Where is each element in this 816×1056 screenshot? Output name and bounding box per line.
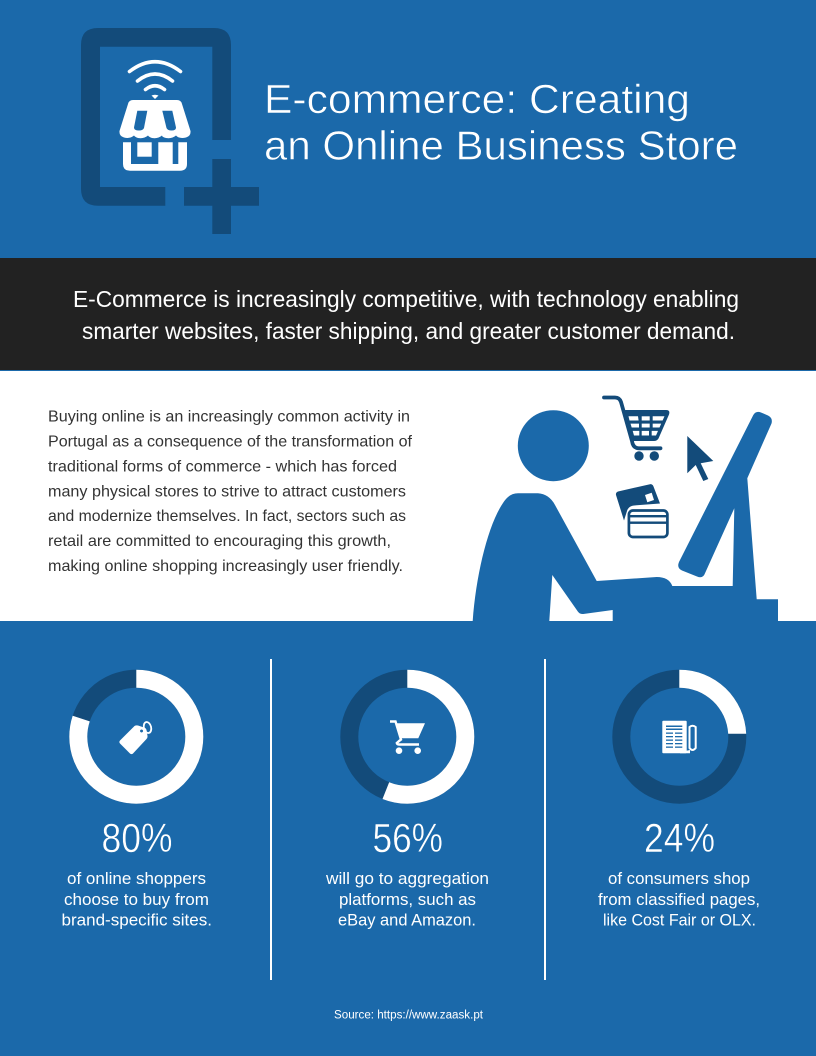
icon: credit cards [616, 484, 667, 537]
panel: description and illustration [0, 371, 816, 621]
icon: cart [390, 722, 425, 754]
body paragraph: and modernize themselves. In fact, sectors such as [48, 508, 406, 525]
icon: online store logo frame with plus [81, 28, 259, 234]
body paragraph: traditional forms of commerce - which has forced [48, 458, 397, 475]
panel: intro band [0, 258, 816, 370]
donut chart: 80% [78, 679, 194, 795]
stat: 24 percent [598, 670, 760, 930]
body paragraph: Buying online is an increasingly common activity in [48, 408, 410, 426]
donut chart: 24% [621, 670, 746, 795]
intro statement [73, 286, 739, 344]
title: E-commerce: Creating [264, 76, 690, 122]
icon: shopping cart [604, 398, 669, 461]
title: an Online Business Store [264, 122, 738, 168]
divider [270, 659, 272, 980]
stat: 56 percent [325, 679, 489, 930]
intro statement: E-Commerce is increasingly competitive, with technology enabling [73, 286, 739, 312]
stat description: eBay and Amazon. [338, 912, 476, 930]
divider [544, 659, 546, 980]
stat description [325, 870, 489, 930]
stat description: like Cost Fair or OLX. [603, 912, 756, 930]
illustration: person at computer [473, 410, 778, 621]
panel: header [81, 28, 738, 234]
body paragraph: making online shopping increasingly user friendly. [48, 558, 403, 575]
body paragraph: many physical stores to strive to attract customers [48, 483, 406, 500]
icon: price tag [119, 721, 152, 754]
stat description [598, 870, 760, 930]
stat description [62, 870, 212, 930]
stat description: of online shoppers [67, 870, 206, 888]
stat value: 80% [102, 815, 172, 861]
donut chart: 56% [349, 679, 465, 795]
source note: Source: https://www.zaask.pt [334, 1010, 484, 1022]
stat description: brand-specific sites. [62, 912, 212, 930]
stat value: 24% [644, 815, 715, 861]
panel: statistics [62, 659, 760, 980]
body paragraph [48, 408, 413, 575]
stat description: platforms, such as [339, 891, 476, 909]
icon: mouse cursor [687, 436, 713, 481]
body paragraph: Portugal as a consequence of the transformation of [48, 434, 413, 450]
stat description: from classified pages, [598, 891, 760, 909]
stat: 80 percent [62, 679, 212, 930]
intro statement: smarter websites, faster shipping, and greater customer demand. [82, 318, 735, 344]
stat description: choose to buy from [64, 891, 209, 909]
icon: store with wifi [119, 62, 191, 171]
body paragraph: retail are committed to encouraging this growth, [48, 533, 391, 550]
stat description: of consumers shop [608, 870, 750, 888]
title [264, 76, 738, 168]
stat value: 56% [372, 815, 443, 861]
icon: newspaper [662, 721, 696, 753]
stat description: will go to aggregation [325, 870, 489, 888]
